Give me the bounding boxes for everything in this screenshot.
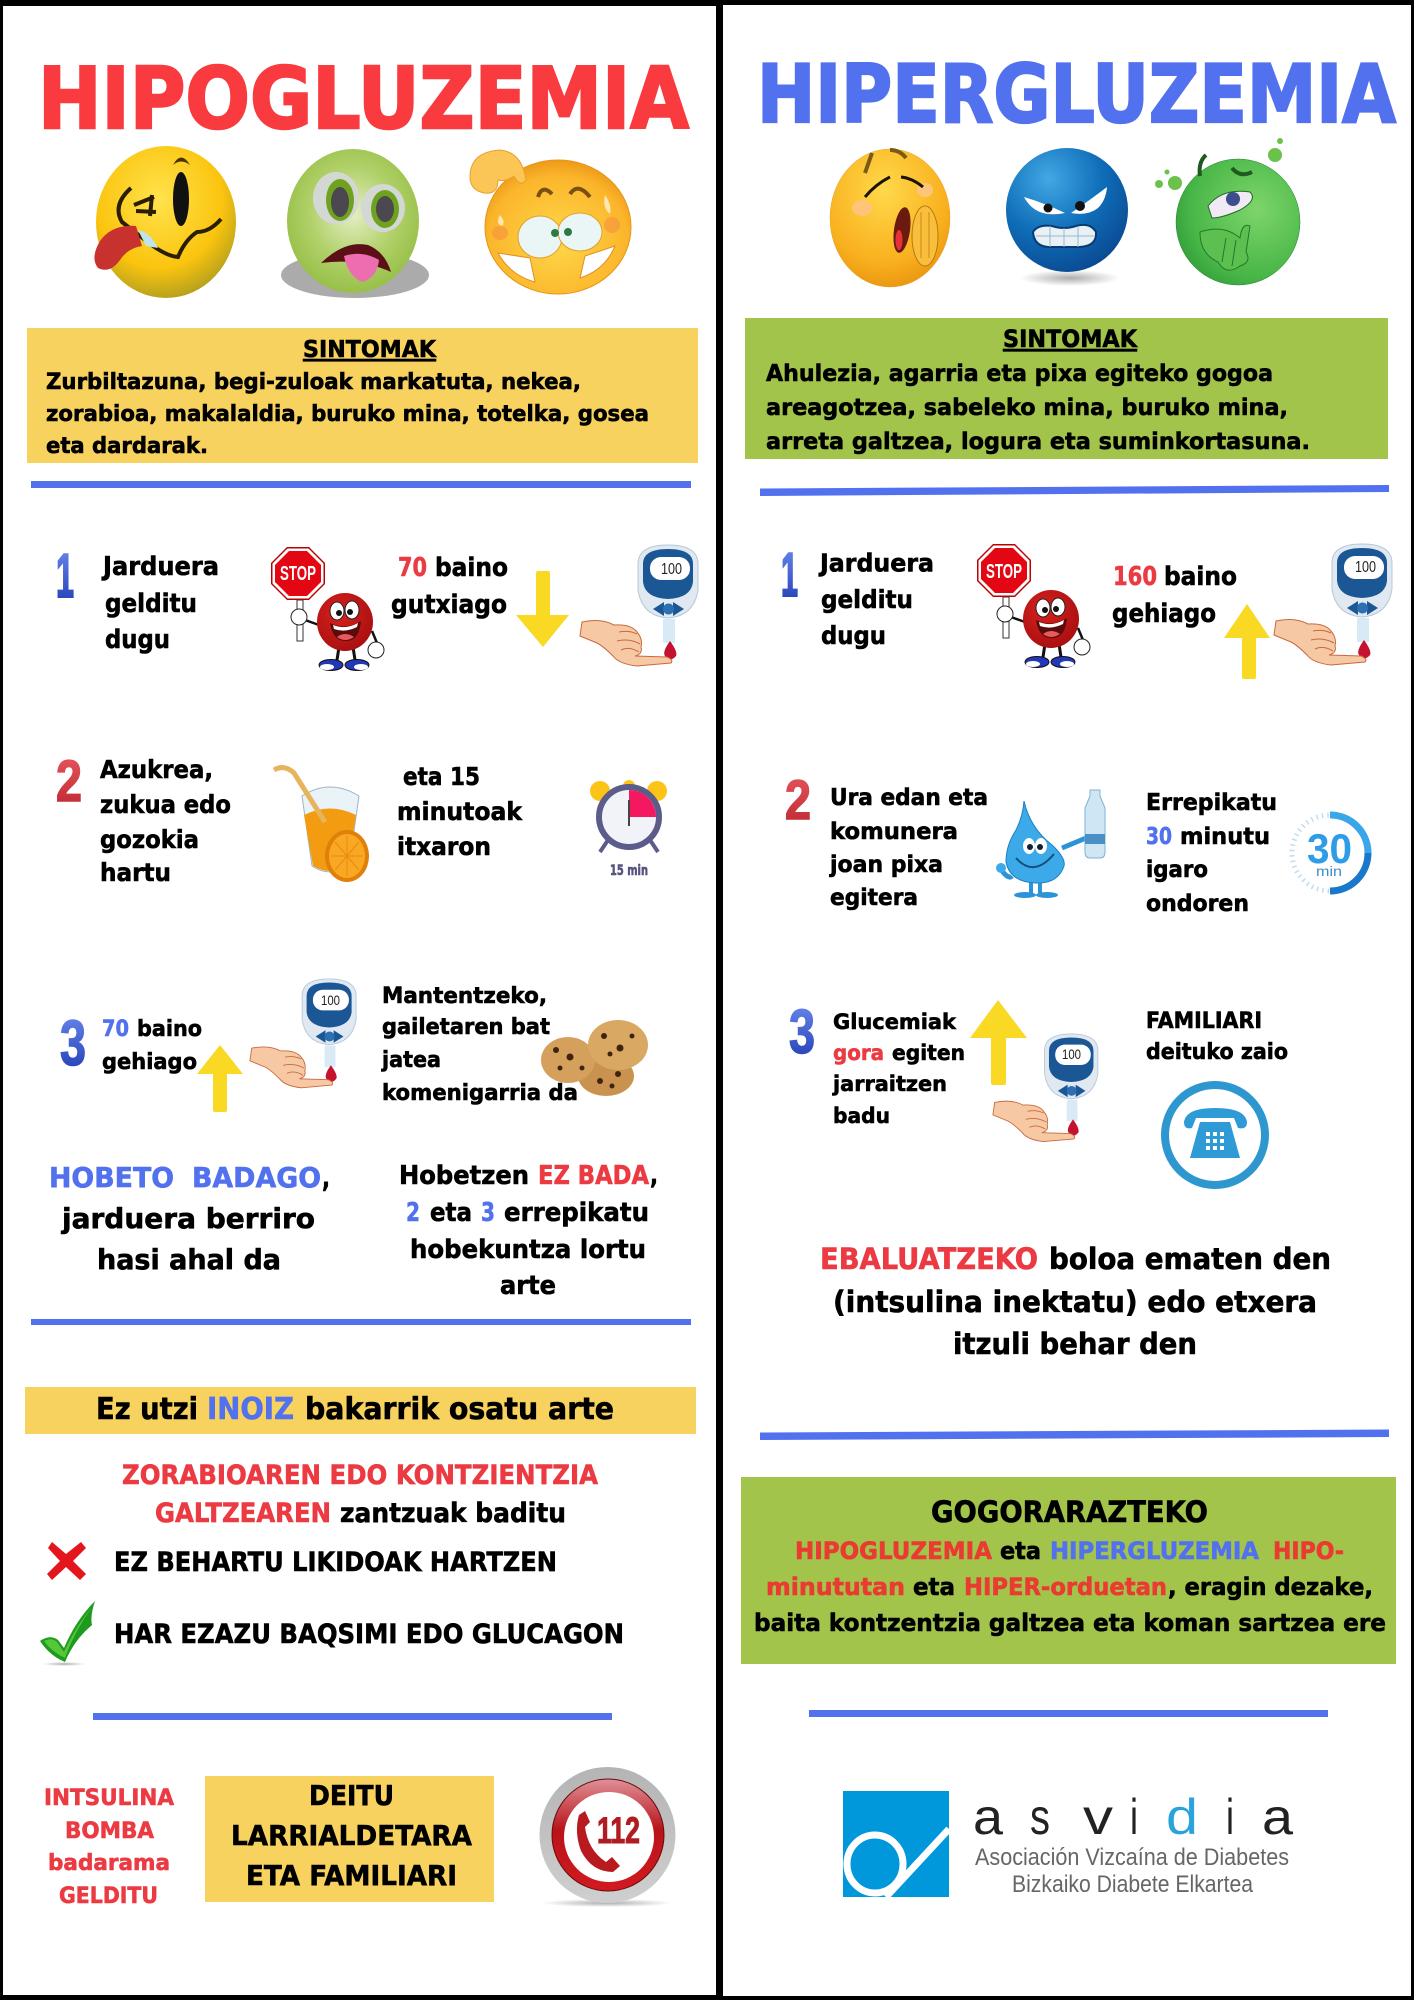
text block: stop insulin pump [44, 1785, 175, 1909]
logo subtitle: Asociación Vizcaína de Diabetes [975, 1844, 1289, 1871]
step 2 number: 2 [785, 768, 811, 831]
text block: if better: , [322, 1161, 330, 1194]
text block: call family: FAMILIARI [1146, 1009, 1262, 1034]
text block: stop insulin pump: GELDITU [59, 1883, 158, 1909]
arrow: down yellow [516, 571, 569, 647]
icon: 30 min timer: 30 [1307, 825, 1352, 872]
text block: wait 15 minutes: itxaron [397, 832, 491, 861]
text block: repeat after 30 minutes: ondoren [1146, 891, 1249, 917]
icon: glucose meter with hand [1274, 544, 1392, 665]
text block: symptoms [46, 370, 649, 459]
text block: stop insulin pump: BOMBA [65, 1818, 155, 1844]
icon: glucose meter with hand [580, 545, 698, 666]
icon: nauseous green emoji [1155, 138, 1300, 285]
text block: if not better: EZ BADA [538, 1161, 649, 1191]
text block: if not better: Hobetzen [399, 1161, 529, 1191]
text block: above 70: 70 [102, 1016, 129, 1042]
text block: if glucose keeps rising: jarraitzen [832, 1072, 947, 1097]
text block: step 1: gelditu [105, 589, 197, 619]
icon: dizzy yellow emoji [94, 146, 236, 298]
text block: if glucose keeps rising: gora [833, 1041, 884, 1066]
panel: sintomak yellow box [27, 328, 698, 463]
text block: keep with a biscuit [381, 984, 578, 1106]
text block: above 160: baino [1164, 562, 1237, 592]
text block: symptoms: arreta galtzea, logura eta suminkortasuna. [766, 427, 1310, 455]
icon: glucose meter with hand: 100 [321, 992, 340, 1008]
icon: green check [40, 1601, 95, 1666]
text block: above 70 [102, 1016, 202, 1075]
step 3 number: 3 [789, 998, 815, 1067]
text block: step 1: Jarduera [101, 552, 219, 582]
logo subtitle [975, 1844, 1289, 1898]
text block: if better: jarduera berriro [61, 1202, 315, 1235]
text block: reminder: HIPOGLUZEMIA [795, 1537, 992, 1565]
text block: if better: HOBETO [49, 1161, 174, 1194]
icon: 112 emergency button: 112 [597, 1810, 640, 1851]
panel: hipergluzemia: 1 [781, 541, 798, 610]
text block: above 70: gehiago [102, 1049, 197, 1075]
icon: 30 min timer [1292, 815, 1368, 891]
panel: hipergluzemia [723, 5, 1411, 1996]
text block: evaluate bolus: (intsulina inektatu) edo etxera [833, 1285, 1317, 1319]
text block: drink water: egitera [830, 885, 918, 911]
text block: stop insulin pump: badarama [48, 1850, 170, 1876]
text block: below 70: baino [435, 553, 508, 583]
text block: below 70: gutxiago [391, 590, 507, 620]
text block: above 160: gehiago [1112, 599, 1216, 629]
heading: GOGORARAZTEKO: GOGORARAZTEKO [931, 1495, 1208, 1529]
callout: call emergencies: ETA FAMILIARI [246, 1859, 457, 1892]
icon: nervous orange emoji [470, 150, 631, 294]
text block: symptoms: zorabioa, makalaldia, buruko mina, totelka, gosea [46, 402, 649, 427]
text block: above 70: baino [137, 1016, 202, 1042]
text block: symptoms: areagotzea, sabeleko mina, buruko mina, [766, 393, 1288, 421]
text block: if not better: , [650, 1161, 658, 1191]
text block: wait 15 minutes: minutoak [397, 797, 523, 826]
logo subtitle: Bizkaiko Diabete Elkartea [1012, 1871, 1254, 1898]
icon: cookies [541, 1020, 648, 1096]
logo wordmark: d [1166, 1789, 1198, 1845]
text block: below 70: 70 [398, 553, 427, 583]
text block: step 1: dugu [105, 625, 170, 655]
text block: step 2: zukua edo [100, 790, 231, 819]
icon: 30 min timer: min [1316, 863, 1342, 879]
text block: if not better [399, 1161, 658, 1301]
text block: signs of fainting [122, 1460, 598, 1529]
icon: glucose meter with hand: 100 [661, 561, 682, 578]
text block: if not better: arte [500, 1271, 556, 1301]
text block: step 1 [818, 548, 934, 650]
text block: drink water [829, 785, 988, 911]
text block: if not better: 2 [406, 1198, 420, 1228]
text block: if not better: 3 [481, 1198, 495, 1228]
text block: call family [1146, 1009, 1288, 1065]
callout: never leave alone: Ez utzi [96, 1392, 198, 1427]
text block: wait 15 minutes: eta 15 [403, 762, 480, 791]
text block: evaluate bolus: EBALUATZEKO [820, 1242, 1038, 1276]
text block: reminder: HIPO- [1273, 1537, 1344, 1565]
text block: keep with a biscuit: gailetaren bat [382, 1015, 550, 1040]
icon: water drop with bottle [996, 790, 1105, 898]
text block: stop insulin pump: INTSULINA [44, 1785, 175, 1811]
icon: glucose meter with hand [993, 1034, 1098, 1142]
text: do not force liquids: EZ BEHARTU LIKIDOAK HARTZEN [114, 1547, 557, 1578]
icon: orange juice [274, 768, 369, 882]
logo wordmark: s [1030, 1789, 1050, 1845]
callout: never leave alone: bakarrik osatu arte [305, 1392, 614, 1427]
icon: glucose meter with hand [250, 979, 356, 1088]
text block: drink water: Ura edan eta [830, 785, 988, 811]
text block: if glucose keeps rising [832, 1010, 965, 1129]
text block: call family: deituko zaio [1146, 1040, 1288, 1065]
icon: glucose meter with hand: 100 [1062, 1046, 1081, 1062]
text block: signs of fainting: zantzuak baditu [340, 1498, 566, 1529]
text block: if better: hasi ahal da [97, 1243, 281, 1276]
text block: repeat after 30 minutes: minutu [1180, 824, 1270, 850]
text block: signs of fainting: GALTZEAREN [155, 1498, 331, 1529]
text block: above 160 [1112, 562, 1237, 629]
text block: symptoms: Ahulezia, agarria eta pixa egiteko gogoa [766, 359, 1273, 387]
text block: repeat after 30 minutes: Errepikatu [1146, 790, 1277, 816]
text block: step 2: Azukrea, [100, 755, 213, 784]
icon: stop sign character: STOP [280, 563, 316, 585]
text block: reminder: eta [913, 1573, 955, 1601]
callout: call emergencies: DEITU [309, 1779, 394, 1812]
text block: symptoms: Zurbiltazuna, begi-zuloak markatuta, nekea, [46, 370, 581, 395]
text block: step 1 [101, 552, 219, 655]
text block: keep with a biscuit: komenigarria da [382, 1081, 578, 1106]
icon: alarm clock 15 min: 15 min [610, 863, 648, 879]
arrow: up yellow [1224, 604, 1270, 679]
arrow: up yellow [970, 1000, 1027, 1085]
icon: sick green emoji [281, 149, 429, 298]
text block: step 1: Jarduera [818, 548, 934, 578]
text block: drink water: komunera [830, 819, 958, 845]
heading: SINTOMAK: SINTOMAK [303, 337, 437, 363]
text block: step 1: gelditu [821, 585, 913, 614]
logo wordmark: i [1226, 1789, 1234, 1845]
icon: angry blue emoji [1006, 148, 1128, 286]
text block: step 1: dugu [821, 621, 886, 650]
text block: keep with a biscuit: jatea [381, 1048, 441, 1073]
text block: repeat after 30 minutes [1146, 790, 1277, 917]
text block: keep with a biscuit: Mantentzeko, [382, 984, 547, 1009]
text block: evaluate bolus: boloa ematen den [1049, 1242, 1331, 1276]
icon: 112 emergency button [540, 1767, 676, 1907]
logo mark [838, 1791, 952, 1903]
text block: step 2: gozokia [100, 825, 199, 854]
text block: evaluate bolus: itzuli behar den [953, 1327, 1197, 1361]
icon: yawning emoji [830, 149, 950, 287]
arrow: up yellow [197, 1045, 243, 1112]
logo: asvidia [838, 1789, 1293, 1903]
text block: evaluate bolus [820, 1242, 1331, 1361]
icon: stop sign character: STOP [986, 561, 1022, 583]
title: HIPOGLUZEMIA: HIPOGLUZEMIA [38, 50, 689, 149]
logo wordmark: a [1262, 1789, 1293, 1845]
icon: alarm clock 15 min [590, 780, 667, 879]
text block: reminder: baita kontzentzia galtzea eta koman sartzea ere [754, 1609, 1386, 1637]
text block: repeat after 30 minutes: igaro [1146, 857, 1208, 883]
text block: symptoms [766, 359, 1310, 455]
text block: reminder: HIPER-orduetan [964, 1573, 1167, 1601]
text block: repeat after 30 minutes: 30 [1146, 824, 1172, 850]
callout: call emergencies: LARRIALDETARA [231, 1819, 472, 1852]
text block: symptoms: eta dardarak. [46, 434, 208, 459]
step 2 number: 2 [56, 749, 82, 814]
panel: sintomak green box [745, 318, 1388, 459]
logo wordmark: i [1130, 1789, 1138, 1845]
text block: reminder: minututan [766, 1573, 905, 1601]
icon: red cross [47, 1542, 86, 1580]
text block: wait 15 minutes [397, 762, 523, 861]
text: take Baqsimi or glucagon: HAR EZAZU BAQSIMI EDO GLUCAGON [114, 1619, 624, 1650]
text block: signs of fainting: ZORABIOAREN EDO KONTZIENTZIA [122, 1460, 598, 1491]
step 3 number: 3 [60, 1007, 86, 1079]
icon: telephone [1165, 1085, 1265, 1185]
logo wordmark: v [1083, 1789, 1113, 1845]
icon: stop sign character [977, 544, 1090, 668]
text block: reminder: HIPERGLUZEMIA [1050, 1537, 1259, 1565]
text block: reminder [754, 1537, 1386, 1637]
text block: if better [49, 1161, 330, 1276]
text block: drink water: joan pixa [829, 852, 943, 878]
text block: if not better: errepikatu [504, 1198, 649, 1228]
text block: if glucose keeps rising: badu [833, 1104, 890, 1129]
text block: if not better: eta [430, 1198, 472, 1228]
callout: call emergencies [205, 1776, 494, 1902]
text block: reminder: eta [1000, 1537, 1041, 1565]
text block: step 2 [100, 755, 231, 887]
text block: reminder: , eragin dezake, [1168, 1573, 1373, 1601]
logo wordmark: a [973, 1789, 1003, 1845]
panel: hipogluzemia [3, 6, 716, 1995]
text block: if not better: hobekuntza lortu [410, 1235, 646, 1265]
icon: stop sign character [271, 547, 384, 670]
text block: below 70 [391, 553, 508, 620]
callout: never leave alone: INOIZ [207, 1392, 294, 1427]
heading: SINTOMAK: SINTOMAK [1003, 325, 1138, 353]
text block: step 2: hartu [100, 858, 171, 887]
step 1 number: 1 [56, 542, 74, 611]
callout: never leave alone [25, 1387, 696, 1434]
callout: gogorarazteko [741, 1477, 1396, 1664]
logo wordmark [973, 1789, 1293, 1845]
icon: glucose meter with hand: 100 [1355, 559, 1376, 576]
text block: above 160: 160 [1113, 562, 1157, 592]
text block: if glucose keeps rising: Glucemiak [833, 1010, 957, 1035]
text block: if glucose keeps rising: egiten [892, 1041, 965, 1066]
text block: if better: BADAGO [192, 1161, 321, 1194]
